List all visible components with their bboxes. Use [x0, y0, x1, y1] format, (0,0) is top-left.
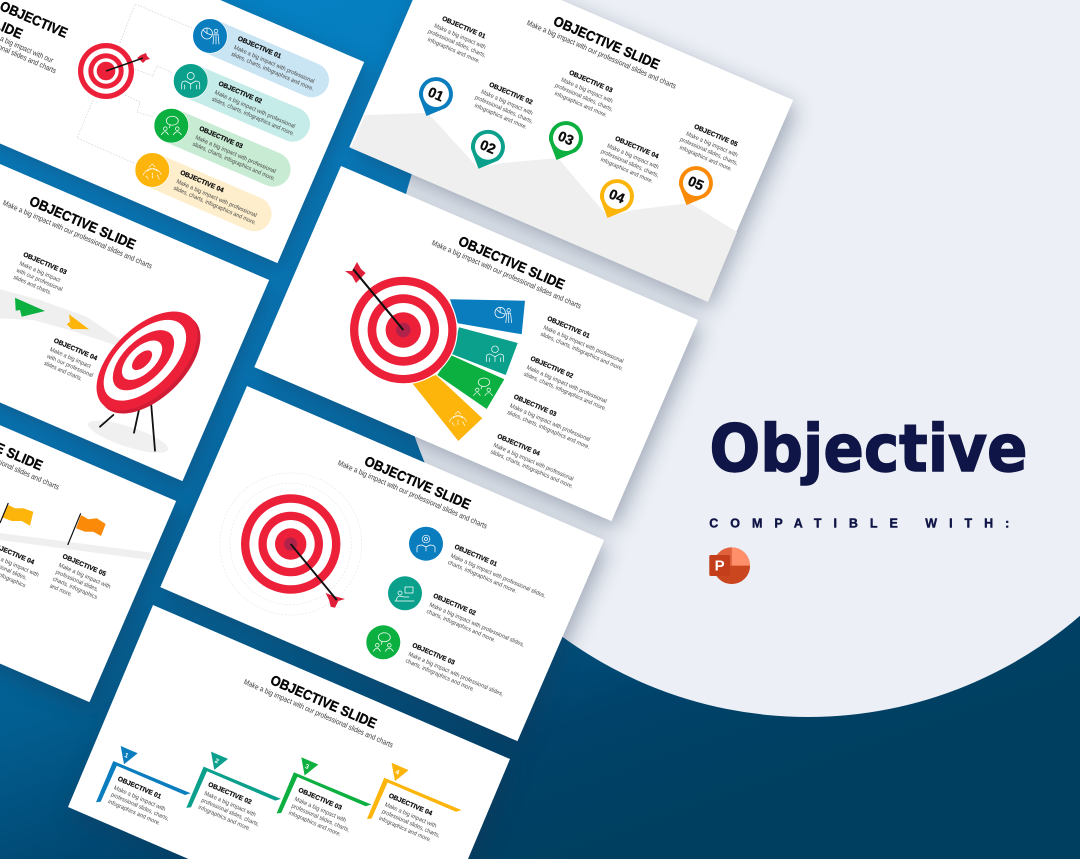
pill: objective 04: Make a big impact with professional — [175, 179, 257, 219]
item: objective 01: Make a big impact with professional slides, — [449, 553, 547, 600]
step: objective 01: Make a big impact with — [113, 785, 166, 813]
step: objective 03: OBJECTIVE 03 — [297, 787, 343, 812]
slide heading: Make a big impact with our professional slides and charts — [430, 238, 583, 311]
panel: slide with target and round icons — [160, 386, 604, 741]
slide heading: OBJECTIVE SLIDE — [362, 453, 473, 512]
text: objective 03: Make a big impact with professional — [509, 403, 591, 443]
step: objective 02: professional slides, charts, — [200, 798, 260, 828]
text: objective 03: OBJECTIVE 03 — [22, 251, 68, 276]
slide heading — [242, 662, 401, 750]
step: objective 04: Make a big impact with — [384, 802, 437, 830]
pill: objective 04: slides, charts, infographics and more. — [172, 186, 257, 227]
text: objective 01: OBJECTIVE 01 — [441, 15, 487, 41]
slide heading: OBJECTIVE SLIDE — [456, 233, 567, 292]
step: objective 04: OBJECTIVE 04 — [387, 793, 433, 818]
text: objective 04: Make a big impact with professional — [492, 443, 574, 483]
slide heading — [525, 3, 684, 91]
icon: PowerPoint logo: P — [715, 558, 725, 574]
item: objective 01: charts, infographics and more. — [447, 560, 518, 595]
panel: slide with pill objectives — [0, 0, 364, 263]
panel: slide with stepped flags — [68, 605, 510, 859]
flight path swoosh — [0, 289, 128, 348]
slide heading: OBJECTIVE SLIDE — [551, 13, 662, 72]
text: objective 04: OBJECTIVE 04 — [496, 433, 541, 458]
item: objective 02 — [388, 576, 530, 655]
pill: objective 02: Make a big impact with professional — [213, 90, 296, 130]
dashed connectors — [77, 4, 192, 171]
text: objective 02: OBJECTIVE 02 — [488, 81, 534, 107]
step: objective 04: professional slides, charts, — [381, 809, 441, 839]
text: objective 04: with our professional — [45, 354, 94, 379]
pill: objective 03: OBJECTIVE 03 — [198, 125, 244, 150]
item: objective 01: OBJECTIVE 01 — [453, 544, 498, 568]
pin 01: 01 — [426, 84, 447, 105]
text: objective 01: Make a big impact with — [433, 23, 486, 51]
text: objective 03 — [11, 251, 70, 300]
pill: objective 01: slides, charts, infographics and more. — [230, 52, 315, 93]
item: objective 03: OBJECTIVE 03 — [411, 642, 456, 667]
item: objective 02: Make a big impact with professional slides, — [428, 602, 525, 649]
pin 03 — [541, 116, 588, 167]
text: objective 05: OBJECTIVE 05 — [61, 553, 107, 578]
slide heading: OBJECTIVE SLIDE — [27, 193, 138, 252]
step: objective 04 — [367, 763, 462, 846]
text: objective 05: Make a big impact with — [685, 131, 738, 159]
step: objective 02 — [186, 752, 281, 835]
step: objective 03: professional slides, charts, — [290, 803, 351, 834]
slide heading — [1, 183, 160, 271]
step: objective 03: 3 — [304, 763, 310, 771]
main title: Objective — [710, 412, 1028, 487]
item: objective 03: Make a big impact with professional slides, — [407, 652, 504, 698]
text: objective 03: OBJECTIVE 03 — [513, 394, 558, 418]
text: objective 05: professional slides, — [54, 570, 99, 593]
mountain silhouette — [351, 113, 737, 302]
panel: slide with flags — [0, 347, 176, 702]
step: objective 01: OBJECTIVE 01 — [117, 776, 162, 801]
pin 03: 03 — [556, 128, 577, 149]
text: objective 05 — [676, 120, 746, 174]
icon: target with dashed halo and arrow — [220, 473, 362, 615]
text: objective 05 — [49, 553, 115, 611]
step: objective 03: infographics and more. — [287, 810, 342, 838]
step: objective 02: 2 — [214, 758, 220, 766]
text: objective 03: OBJECTIVE 03 — [568, 69, 614, 95]
wedge: objective 02 — [452, 327, 518, 375]
text: objective 04: OBJECTIVE 04 — [53, 337, 98, 362]
text: objective 04: Make a big impact — [49, 347, 92, 370]
text: objective 01: slides, charts, infographics and more. — [539, 332, 624, 373]
text: objective 01 — [424, 12, 494, 66]
text: objective 03 — [551, 66, 621, 120]
panel: slide with target and wedges — [254, 166, 698, 521]
pill: objective 01 — [193, 19, 322, 93]
text: objective 04: professional slides, charts, — [600, 149, 660, 179]
step: objective 03: Make a big impact with — [293, 797, 347, 824]
compatibility label: COMPATIBLE WITH: — [709, 516, 1009, 530]
item: objective 03: charts, infographics and more. — [404, 658, 475, 694]
text: objective 03: with our professional — [14, 268, 63, 293]
icon: flag 05 — [68, 513, 106, 545]
text: objective 03: infographics and more. — [553, 91, 608, 119]
text: objective 01: OBJECTIVE 01 — [546, 315, 591, 340]
background: light circular panel — [392, 0, 1080, 717]
text: objective 04: infographics and more. — [599, 157, 654, 185]
item: objective 03 — [366, 625, 509, 705]
step: objective 03 — [277, 757, 371, 841]
item: objective 02: charts, infographics and more. — [425, 609, 496, 644]
pin 02: 02 — [478, 136, 499, 157]
icon: flag 04 — [0, 503, 33, 526]
text: objective 05: professional slides, charts, — [679, 137, 739, 167]
step: objective 04: infographics and more. — [378, 816, 432, 844]
step: objective 02: infographics and more. — [197, 805, 252, 833]
icon: green paper plane — [15, 298, 45, 317]
panel: slide with mountain pins — [349, 0, 793, 302]
text: objective 01: professional slides, charts, — [427, 29, 487, 59]
text: objective 04: slides and charts. — [43, 361, 83, 383]
pill: objective 03: Make a big impact with professional — [194, 135, 276, 175]
text: objective 03: slides and charts. — [12, 275, 52, 297]
text: objective 01: Make a big impact with professional — [542, 325, 624, 365]
pin 01 — [411, 72, 458, 123]
slide heading — [430, 223, 589, 311]
text: objective 05: and more. — [49, 583, 73, 599]
text: objective 02: slides, charts, infographics and more. — [523, 372, 607, 413]
text: objective 02: Make a big impact with professional — [525, 365, 607, 405]
text: objective 04: Make a big impact with — [606, 143, 659, 171]
slide heading — [336, 443, 495, 531]
pill: objective 03: slides, charts, infographics and more. — [191, 142, 276, 183]
slide heading: Make a big impact with our professional slides and charts — [242, 677, 395, 750]
step: objective 01: professional slides, charts, — [110, 792, 170, 823]
pill: objective 02: slides, charts, infographics and more. — [211, 97, 295, 138]
text: objective 04 — [0, 541, 44, 599]
panel: slide with 3D target and paper planes — [0, 126, 269, 481]
text: objective 04 — [597, 132, 667, 186]
text: objective 02 — [471, 78, 541, 132]
icon: PowerPoint logo — [709, 547, 750, 584]
text: objective 03: professional slides, charts, — [554, 83, 614, 113]
text: objective 04: slides, charts, infographics and more. — [489, 449, 574, 490]
pill: objective 02: OBJECTIVE 02 — [217, 80, 263, 105]
pin 02 — [463, 124, 510, 175]
icon: target with arrow — [78, 43, 150, 99]
pill: objective 04: OBJECTIVE 04 — [179, 169, 225, 194]
icon: yellow paper plane — [67, 314, 89, 329]
text: objective 03: Make a big impact — [18, 261, 61, 284]
text: objective 02: infographics and more. — [473, 103, 528, 131]
slide heading — [0, 404, 67, 492]
step: objective 04: 4 — [394, 769, 401, 777]
item: objective 02: OBJECTIVE 02 — [432, 593, 477, 617]
text: objective 02: professional slides, charts, — [474, 95, 534, 125]
wedge: objective 03 — [437, 355, 504, 409]
step: objective 01 — [96, 746, 191, 830]
pin 05 — [671, 161, 718, 212]
text: objective 04 — [42, 337, 101, 386]
step: objective 02: OBJECTIVE 02 — [207, 781, 253, 806]
text: objective 03: Make a big impact with — [560, 77, 613, 105]
text: objective 05: OBJECTIVE 05 — [693, 123, 739, 149]
step: objective 02: Make a big impact with — [203, 791, 256, 818]
wedge: objective 04 — [412, 375, 482, 441]
ground band — [0, 533, 152, 560]
text: objective 01: infographics and more. — [426, 37, 481, 65]
pin 04 — [592, 174, 639, 225]
pill: objective 02 — [173, 64, 302, 138]
text: objective 04: OBJECTIVE 04 — [614, 135, 660, 161]
pill: objective 04 — [135, 153, 264, 227]
pill: objective 01: Make a big impact with professional — [233, 45, 315, 85]
text: objective 05: Make a big impact with — [57, 563, 111, 590]
text: objective 05: infographics and more. — [678, 145, 733, 173]
icon: 3D target on tripod — [79, 293, 218, 459]
text: objective 02: Make a big impact with — [480, 89, 533, 117]
step: objective 01: 1 — [123, 752, 130, 760]
text: objective 03: slides, charts, infographics and more. — [506, 410, 591, 451]
text: objective 05: charts, infographics — [52, 577, 98, 601]
step: objective 01: infographics and more. — [107, 799, 161, 827]
item: objective 01 — [409, 527, 551, 606]
slide heading: Make a big impact with our professional slides and charts — [336, 458, 489, 531]
slide heading: Make a big impact with our professional slides and charts — [525, 18, 678, 91]
pin 04: 04 — [607, 186, 628, 207]
text: objective 02: OBJECTIVE 02 — [529, 355, 574, 380]
slide heading: OBJECTIVE SLIDE — [268, 672, 379, 731]
pin 05: 05 — [686, 173, 707, 194]
pill: objective 01: OBJECTIVE 01 — [237, 35, 282, 60]
wedge: objective 01 — [450, 299, 525, 334]
icon: large target with arrow — [345, 262, 458, 384]
pill: objective 03 — [154, 108, 283, 183]
slide heading: Make a big impact with our professional slides and charts — [1, 198, 154, 271]
